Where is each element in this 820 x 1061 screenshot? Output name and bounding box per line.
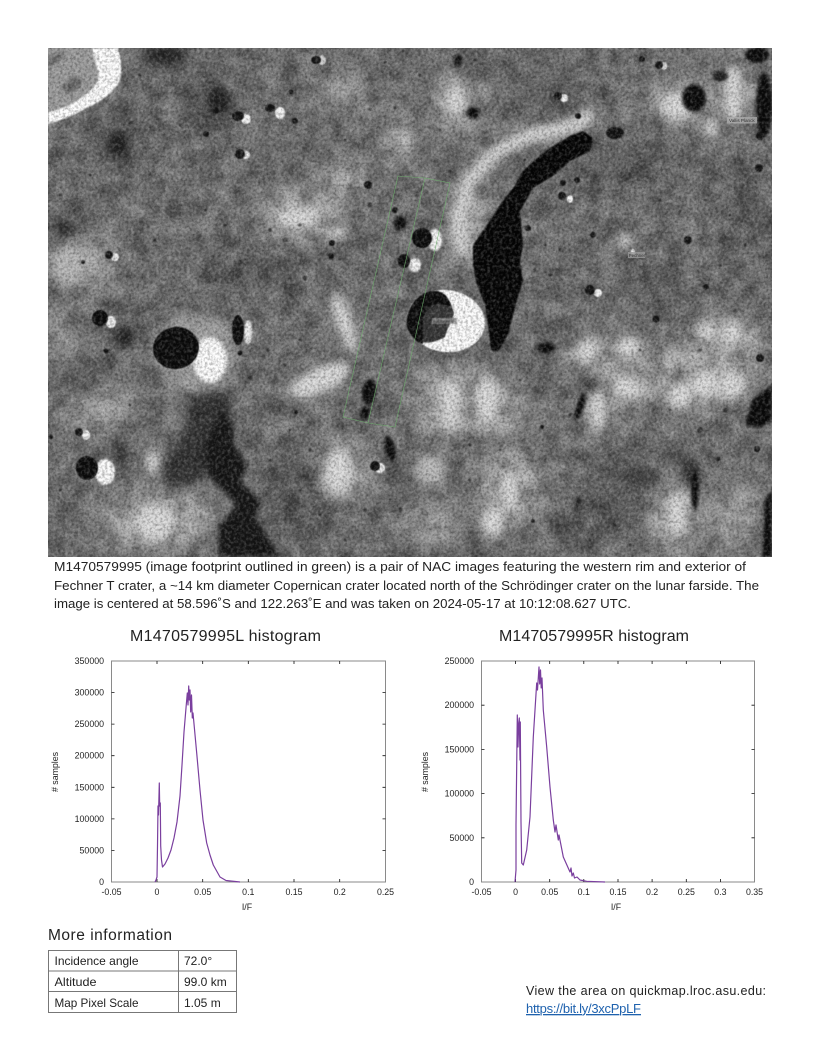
chart: right histogram: -0.05 <box>471 887 492 897</box>
chart: right histogram: 0.25 <box>678 887 695 897</box>
heading: more information: More information <box>48 927 172 944</box>
histogram curve <box>515 667 605 882</box>
table: image parameters: 99.0 km <box>184 975 227 989</box>
chart: left histogram: 350000 <box>75 656 104 666</box>
chart: left histogram: -0.05 <box>101 887 122 897</box>
label: Fechner: Fechner <box>629 253 646 258</box>
chart: right histogram: 0.2 <box>646 887 658 897</box>
chart: right histogram: 0.05 <box>541 887 558 897</box>
chart: right histogram: 0 <box>469 877 474 887</box>
chart: left histogram: 300000 <box>75 688 104 698</box>
crater: left large <box>150 314 237 390</box>
chart: right histogram: # samples <box>420 751 430 792</box>
chart: right histogram: 0.35 <box>746 887 763 897</box>
caption text: Fechner T crater, a ~14 km diameter Copernican crater located north of the Schrödinger crater on the lunar farside. The <box>54 579 759 593</box>
big scarp shadow <box>473 127 624 352</box>
chart: right histogram: 50000 <box>450 833 474 843</box>
chart: left histogram: 150000 <box>75 782 104 792</box>
large craters <box>49 55 764 546</box>
chart: right histogram: 0.3 <box>714 887 727 897</box>
shadow band below left crater <box>205 410 281 557</box>
film grain <box>48 48 772 557</box>
table: image parameters <box>48 950 236 1012</box>
chart: left histogram <box>50 656 394 912</box>
chart: left histogram: 0.15 <box>285 887 303 897</box>
crater: Fechner T <box>403 285 489 357</box>
chart: left histogram: 200000 <box>75 751 104 761</box>
heading: left histogram title: M1470579995L histogram <box>130 628 321 645</box>
text: quickmap link <box>526 984 766 1016</box>
chart: left histogram: 0.2 <box>334 887 346 897</box>
top-left crater rim <box>48 48 121 124</box>
chart: right histogram: 0.15 <box>609 887 627 897</box>
table: image parameters: 1.05 m <box>184 996 221 1010</box>
image footprint outline in green <box>343 176 450 427</box>
table: image parameters: Map Pixel Scale <box>54 996 139 1010</box>
heading: right histogram title: M1470579995R histogram <box>499 628 689 645</box>
chart: right histogram: 250000 <box>445 656 474 666</box>
histogram curve <box>155 686 240 882</box>
label: Fechner T: Fechner T <box>433 319 454 324</box>
right side shadows <box>358 47 772 557</box>
chart: right histogram: 200000 <box>445 700 474 710</box>
chart: left histogram: 100000 <box>75 814 104 824</box>
caption text: image is centered at 58.596˚S and 122.263˚E and was taken on 2024-05-17 at 10:12:08.627 UTC. <box>54 597 631 611</box>
satellite image: lunar surface around Fechner T crater <box>48 48 772 557</box>
label: Vallis Planck: Vallis Planck <box>729 118 755 123</box>
table: image parameters: 72.0° <box>184 954 212 968</box>
chart: left histogram: # samples <box>50 751 60 792</box>
chart: right histogram: 0 <box>513 887 518 897</box>
broad light and dark terrain <box>44 42 767 555</box>
text: quickmap link: View the area on quickmap.lroc.asu.edu: <box>526 984 766 998</box>
chart: left histogram: I/F <box>242 902 253 912</box>
chart: left histogram: 0 <box>99 877 104 887</box>
chart: right histogram: 100000 <box>445 789 474 799</box>
medium bright ridges and shadows <box>52 47 745 540</box>
small bright-rimmed craters <box>82 55 667 440</box>
caption text: M1470579995 (image footprint outlined in green) is a pair of NAC images featuring the western rim and exterior of <box>54 560 747 574</box>
chart: right histogram <box>420 656 763 912</box>
chart: left histogram: 250000 <box>75 719 104 729</box>
chart: left histogram: 50000 <box>80 845 104 855</box>
table: image parameters: Altitude <box>54 975 97 989</box>
mottled texture <box>48 48 772 557</box>
tiny craters <box>59 58 746 546</box>
chart: right histogram: 150000 <box>445 744 474 754</box>
caption text <box>54 560 759 611</box>
chart: right histogram: I/F <box>611 902 622 912</box>
chart: left histogram: 0.1 <box>242 887 255 897</box>
chart: right histogram: 0.1 <box>578 887 590 897</box>
chart: left histogram: 0.25 <box>377 887 394 897</box>
label: Vallis Planck <box>727 117 757 124</box>
table: image parameters: Incidence angle <box>54 954 139 968</box>
chart: left histogram: 0 <box>155 887 160 897</box>
chart: left histogram: 0.05 <box>194 887 211 897</box>
text: quickmap link: https://bit.ly/3xcPpLF <box>526 1001 641 1016</box>
